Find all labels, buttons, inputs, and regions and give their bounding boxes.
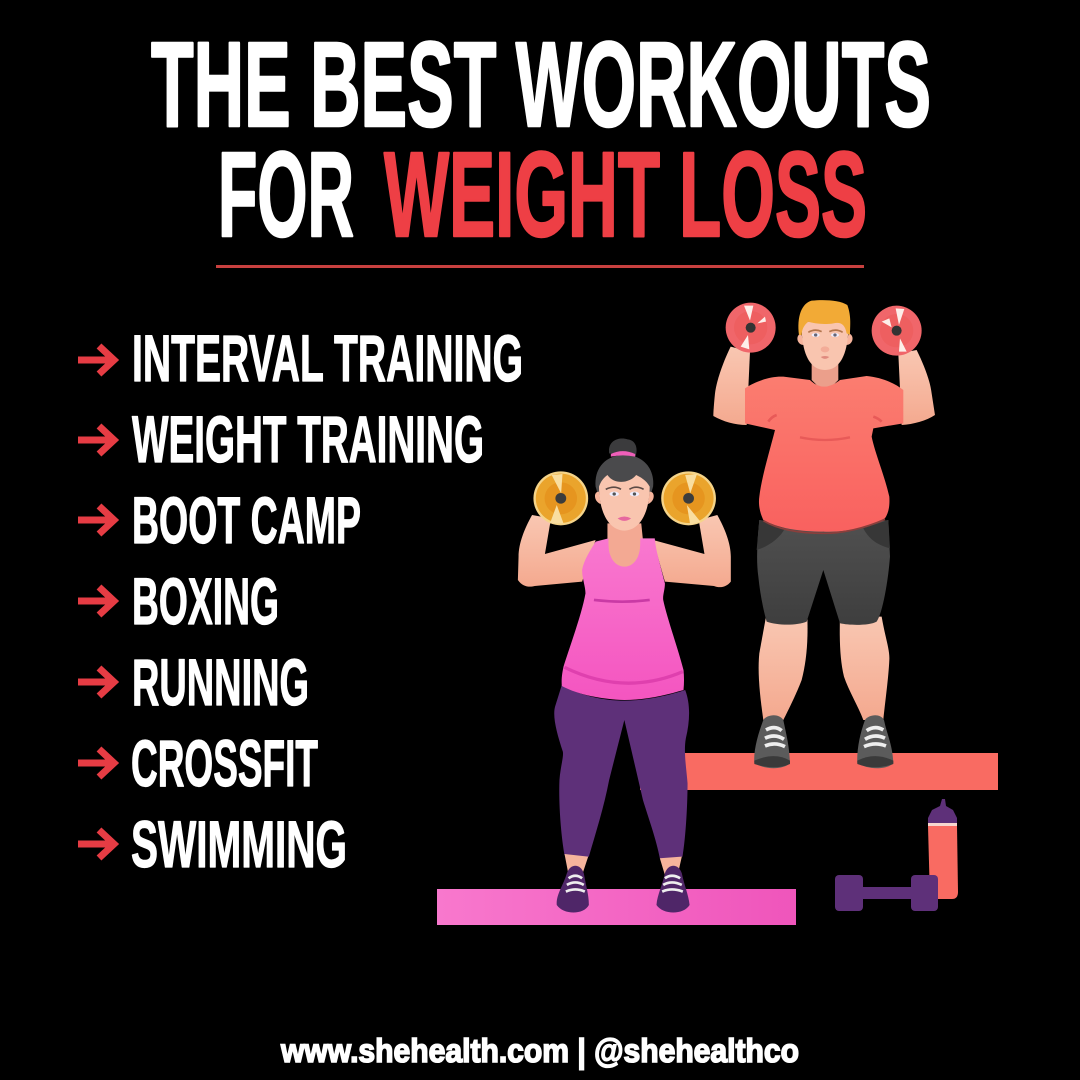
item: swimming bbox=[78, 807, 347, 881]
illustration: man with dumbbells bbox=[713, 300, 935, 768]
man shorts bbox=[757, 520, 890, 625]
woman arms bbox=[518, 515, 596, 587]
icon: dumbbell bbox=[835, 875, 938, 911]
man neck bbox=[812, 362, 838, 393]
pink exercise mat bbox=[437, 889, 796, 925]
woman hair band bbox=[611, 451, 635, 457]
man left dumbbell bbox=[726, 303, 776, 353]
woman right shoe bbox=[656, 866, 690, 912]
man right dumbbell bbox=[872, 306, 922, 356]
man head bbox=[797, 300, 853, 370]
item: running bbox=[78, 645, 309, 719]
item: swimming: SWIMMING bbox=[131, 807, 347, 881]
man legs bbox=[759, 617, 808, 720]
woman ankles bbox=[565, 854, 682, 875]
title bbox=[151, 16, 931, 262]
item: crossfit bbox=[78, 726, 318, 800]
woman left shoe bbox=[557, 866, 589, 912]
title line 2: for: FOR bbox=[218, 126, 354, 262]
item: boot camp bbox=[78, 483, 361, 557]
man t-shirt bbox=[745, 376, 903, 532]
item: boxing bbox=[78, 564, 279, 638]
footer website and handle: www.shehealth.com | @shehealthco bbox=[280, 1032, 799, 1069]
item: weight training bbox=[78, 402, 484, 476]
item: boxing: BOXING bbox=[132, 564, 279, 638]
item: interval training: INTERVAL TRAINING bbox=[132, 321, 523, 395]
woman tank top bbox=[562, 538, 684, 700]
man left shoe bbox=[754, 715, 790, 768]
woman leggings bbox=[554, 685, 689, 860]
item: boot camp: BOOT CAMP bbox=[132, 483, 361, 557]
illustration: woman with dumbbells bbox=[518, 438, 731, 912]
workout list bbox=[78, 321, 523, 881]
woman head bbox=[595, 475, 654, 531]
woman left dumbbell bbox=[533, 471, 588, 525]
man arms bbox=[713, 347, 750, 425]
woman hair bbox=[595, 455, 653, 498]
item: interval training bbox=[78, 321, 523, 395]
title underline bbox=[216, 265, 864, 268]
woman right dumbbell bbox=[661, 471, 716, 525]
item: weight training: WEIGHT TRAINING bbox=[132, 402, 484, 476]
woman neck and chest bbox=[607, 523, 643, 570]
icon: water bottle bbox=[928, 799, 958, 899]
item: running: RUNNING bbox=[132, 645, 309, 719]
man right shoe bbox=[857, 715, 893, 768]
item: crossfit: CROSSFIT bbox=[131, 726, 318, 800]
coral step platform bbox=[640, 753, 998, 790]
woman hair bun bbox=[609, 438, 637, 458]
